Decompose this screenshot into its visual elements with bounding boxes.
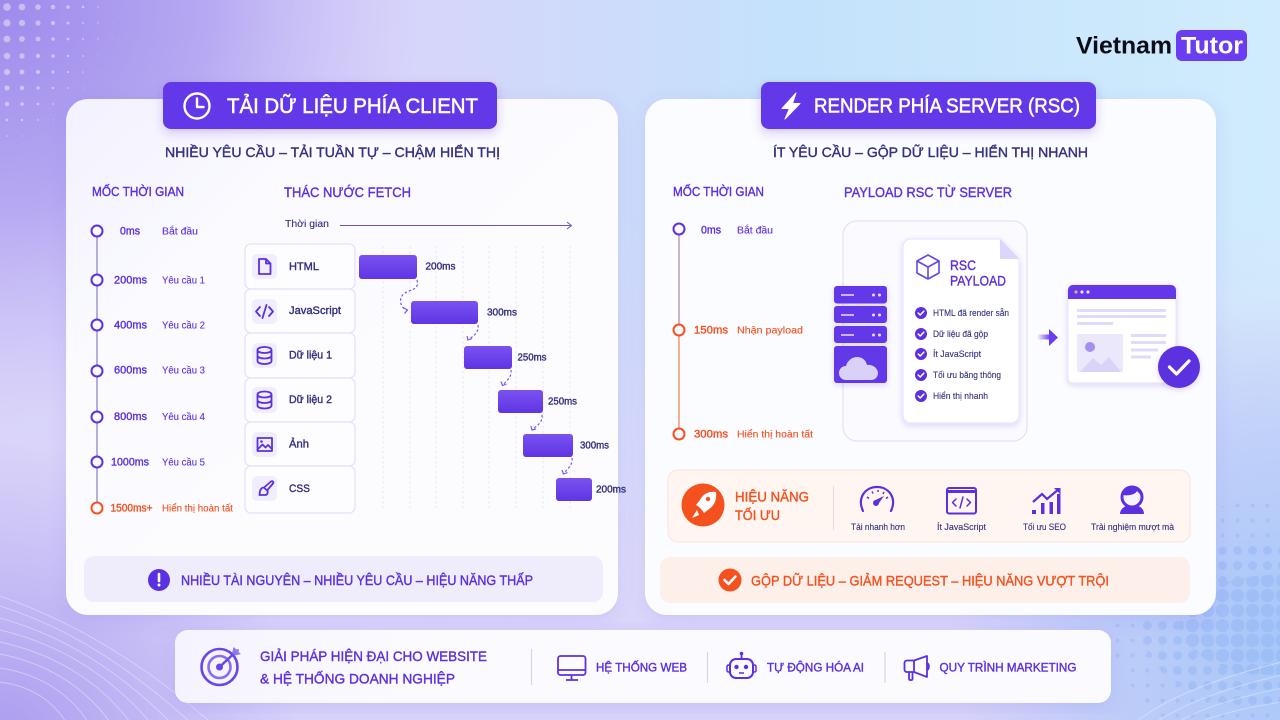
row: Ảnh: 300ms (580, 440, 609, 452)
row: JavaScript: JavaScript (289, 305, 341, 317)
chart: fetch waterfall: THÁC NƯỚC FETCH (284, 184, 411, 200)
callout: client summary: NHIỀU TÀI NGUYÊN – NHIỀU YÊU CẦU – HIỆU NĂNG THẤP (181, 573, 533, 588)
logo: Vietnam Tutor (1076, 30, 1247, 61)
row: HTML: HTML (289, 261, 319, 273)
timeline: server milestones: MỐC THỜI GIAN (673, 184, 764, 199)
row: JavaScript (245, 289, 517, 333)
panel: client-side data fetching (66, 82, 626, 615)
chart: fetch waterfall (245, 184, 626, 513)
timeline: server milestones: Hiển thị hoàn tất (737, 428, 813, 440)
row: HTML (245, 244, 456, 289)
document: RSC payload: Ít JavaScript (933, 349, 981, 359)
panel: server-side rendering (645, 82, 1216, 615)
subtitle: server: ÍT YÊU CẦU – GỘP DỮ LIỆU – HIỂN THỊ NHANH (773, 143, 1088, 160)
timeline: client milestones: 200ms (114, 274, 147, 286)
row: Ảnh (245, 422, 609, 466)
icon: browser window with check (1068, 285, 1200, 388)
diagram: RSC payload from server (834, 184, 1200, 441)
timeline: client milestones: Yêu cầu 1 (162, 274, 205, 286)
timeline: server milestones: 300ms (694, 428, 728, 440)
panel: optimized performance: Tối ưu SEO (1023, 522, 1066, 532)
timeline: server milestones (673, 184, 813, 440)
panel: optimized performance (668, 470, 1190, 542)
panel: footer solutions: TỰ ĐỘNG HÓA AI (767, 660, 864, 674)
panel: footer solutions: & HỆ THỐNG DOANH NGHIỆP (260, 670, 455, 686)
timeline: client milestones (92, 184, 233, 514)
panel: optimized performance: Ít JavaScript (937, 522, 986, 532)
row: HTML: 200ms (426, 262, 456, 272)
icon: monitor (558, 656, 586, 680)
panel: optimized performance: Trải nghiệm mượt mà (1091, 522, 1174, 532)
timeline: server milestones: 0ms (701, 224, 721, 236)
panel: footer solutions: QUY TRÌNH MARKETING (940, 660, 1076, 674)
document: RSC payload: HTML đã render sẵn (933, 308, 1009, 318)
panel: footer solutions (175, 630, 1111, 703)
timeline: server milestones: Nhận payload (737, 324, 803, 336)
panel: footer solutions: GIẢI PHÁP HIỆN ĐẠI CHO WEBSITE (260, 648, 487, 664)
panel: footer solutions: HỆ THỐNG WEB (596, 660, 687, 674)
row: Dữ liệu 2: 250ms (548, 396, 577, 408)
arrows: dependency flow (401, 280, 572, 474)
panel: optimized performance: Tải nhanh hơn (851, 522, 905, 532)
subtitle: client: NHIỀU YÊU CẦU – TẢI TUẦN TỰ – CHẬM HIỂN THỊ (165, 143, 500, 160)
timeline: client milestones: Yêu cầu 3 (162, 364, 205, 376)
logo: Vietnam Tutor: Tutor (1181, 32, 1243, 60)
callout: server summary: GỘP DỮ LIỆU – GIẢM REQUEST – HIỆU NĂNG VƯỢT TRỘI (751, 572, 1109, 588)
timeline: client milestones: Yêu cầu 5 (162, 456, 205, 468)
timeline: server milestones: Bắt đầu (737, 224, 773, 236)
row: Dữ liệu 1: 250ms (518, 352, 546, 364)
heading: client (163, 82, 497, 129)
row: CSS (245, 466, 626, 513)
icon: SEO growth chart (1032, 488, 1060, 514)
icon: smooth experience user (1120, 487, 1144, 514)
chart: fetch waterfall: Thời gian (285, 218, 329, 230)
document: RSC payload: PAYLOAD (950, 272, 1006, 288)
row: JavaScript: 300ms (487, 308, 517, 318)
panel: optimized performance: TỐI ƯU (735, 506, 780, 523)
row: Dữ liệu 2 (245, 378, 577, 422)
diagram: RSC payload from server: PAYLOAD RSC TỪ SERVER (844, 184, 1012, 200)
timeline: client milestones: 1500ms+ (110, 502, 152, 514)
icon: AI robot (727, 652, 756, 678)
icon: marketing megaphone (904, 656, 929, 680)
timeline: client milestones: 0ms (120, 226, 140, 238)
row: Dữ liệu 2: Dữ liệu 2 (289, 394, 332, 406)
panel: optimized performance: HIỆU NĂNG (735, 488, 809, 504)
document: RSC payload (903, 239, 1019, 423)
row: Dữ liệu 1: Dữ liệu 1 (289, 350, 332, 362)
heading: client: TẢI DỮ LIỆU PHÍA CLIENT (227, 94, 478, 118)
timeline: client milestones: Yêu cầu 4 (162, 411, 205, 423)
callout: server summary (660, 557, 1190, 603)
logo: Vietnam Tutor: Vietnam (1076, 32, 1172, 60)
icon: speed gauge (861, 487, 893, 511)
timeline: server milestones: 150ms (694, 324, 728, 336)
row: Dữ liệu 1 (245, 333, 546, 378)
document: RSC payload: Tối ưu băng thông (933, 370, 1001, 380)
timeline: client milestones: Hiển thị hoàn tất (162, 502, 233, 514)
arrow: server to browser (1037, 329, 1058, 346)
row: Ảnh: Ảnh (289, 438, 309, 450)
timeline: client milestones: Yêu cầu 2 (162, 320, 205, 332)
row: CSS: CSS (289, 483, 310, 495)
document: RSC payload: Hiển thị nhanh (933, 391, 988, 401)
callout: client summary (84, 556, 603, 602)
icon: server with cloud (834, 286, 887, 383)
timeline: client milestones: 600ms (114, 364, 147, 376)
row: CSS: 200ms (596, 484, 626, 496)
heading: server (761, 82, 1096, 129)
timeline: client milestones: 1000ms (111, 456, 149, 468)
timeline: client milestones: 400ms (114, 320, 147, 332)
document: RSC payload: Dữ liệu đã gộp (933, 329, 988, 339)
timeline: client milestones: 800ms (114, 411, 147, 423)
document: RSC payload: RSC (950, 257, 976, 273)
timeline: client milestones: MỐC THỜI GIAN (92, 184, 184, 199)
timeline: client milestones: Bắt đầu (162, 224, 198, 238)
icon: code window (947, 488, 976, 514)
heading: server: RENDER PHÍA SERVER (RSC) (814, 94, 1080, 118)
icon: target with arrow (202, 647, 241, 685)
